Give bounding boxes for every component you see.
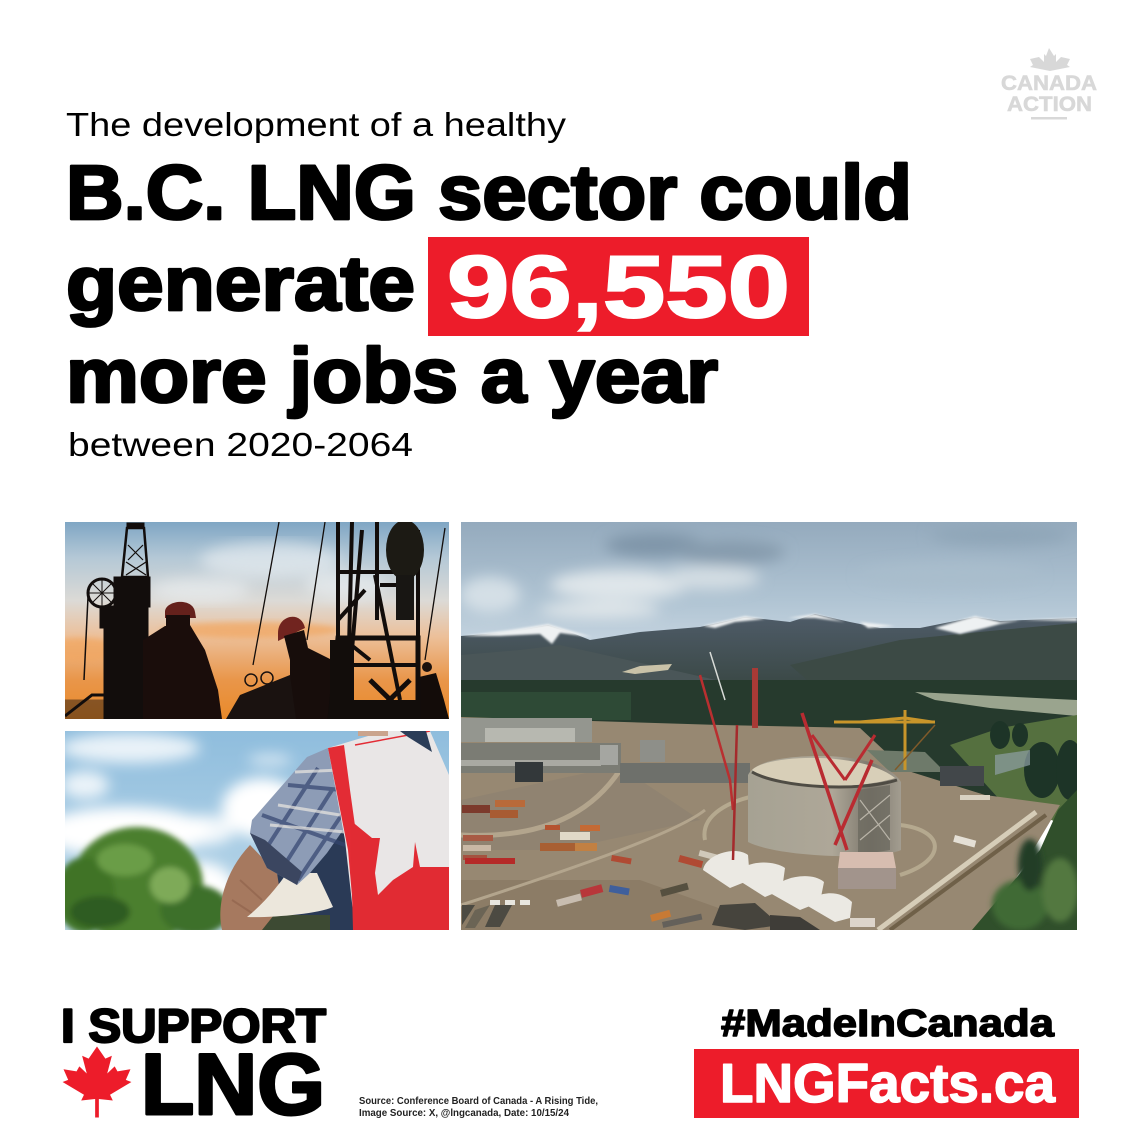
cranes — [700, 652, 935, 860]
source note — [359, 1095, 598, 1119]
website badge: LNGFacts.ca — [720, 1052, 1055, 1114]
source note: Source: Conference Board of Canada - A Rising Tide, — [359, 1095, 598, 1107]
ground — [461, 717, 1060, 930]
photo: LNG Canada construction site — [460, 522, 1084, 930]
hashtag: #MadeInCanada — [721, 1003, 1055, 1045]
white tents — [703, 851, 852, 922]
process modules — [461, 718, 750, 783]
clouds — [65, 731, 294, 898]
photo: worker with Canadian flag — [65, 731, 449, 930]
forest band and wetlands — [461, 680, 1077, 820]
logo: Canada Action: CANADA — [1001, 72, 1097, 95]
headline: B.C. LNG sector could — [66, 150, 912, 236]
containers and equipment — [462, 795, 990, 930]
logo: I Support LNG: LNG — [141, 1037, 325, 1133]
Canadian flag cape — [328, 731, 449, 930]
source note: Image Source: X, @lngcanada, Date: 10/15/24 — [359, 1107, 569, 1119]
low building by tank — [838, 852, 896, 889]
tree — [65, 822, 224, 930]
lower right forest — [972, 790, 1077, 930]
silhouette: left derrick — [65, 523, 150, 719]
LNG storage tank — [748, 756, 901, 856]
dark building — [940, 766, 984, 786]
silhouette: right rig — [253, 520, 445, 719]
headline: more jobs a year — [66, 333, 718, 419]
silhouette: workers — [143, 602, 449, 719]
date range: between 2020-2064 — [68, 426, 413, 463]
clouds — [460, 525, 1070, 618]
pond — [867, 750, 945, 772]
mountains — [461, 614, 1077, 680]
logo: Canada Action — [1001, 48, 1097, 120]
logo: I Support LNG — [61, 999, 326, 1133]
icon: red maple leaf — [63, 1046, 131, 1118]
roads — [461, 770, 620, 835]
helmet — [247, 873, 333, 917]
plaid shirt sleeve — [250, 748, 350, 885]
arm — [220, 845, 282, 930]
headline: generate — [66, 241, 415, 327]
dark shirt body and background below helmet — [277, 830, 353, 930]
highlighted number: 96,550: 96,550 — [447, 237, 790, 336]
photo: rig workers at sunset — [40, 520, 449, 719]
intro line: The development of a healthy — [66, 106, 567, 143]
snow caps — [463, 614, 1077, 644]
logo: I Support LNG: I SUPPORT — [61, 999, 326, 1052]
logo: Canada Action: ACTION — [1007, 93, 1092, 116]
headline — [66, 150, 912, 419]
